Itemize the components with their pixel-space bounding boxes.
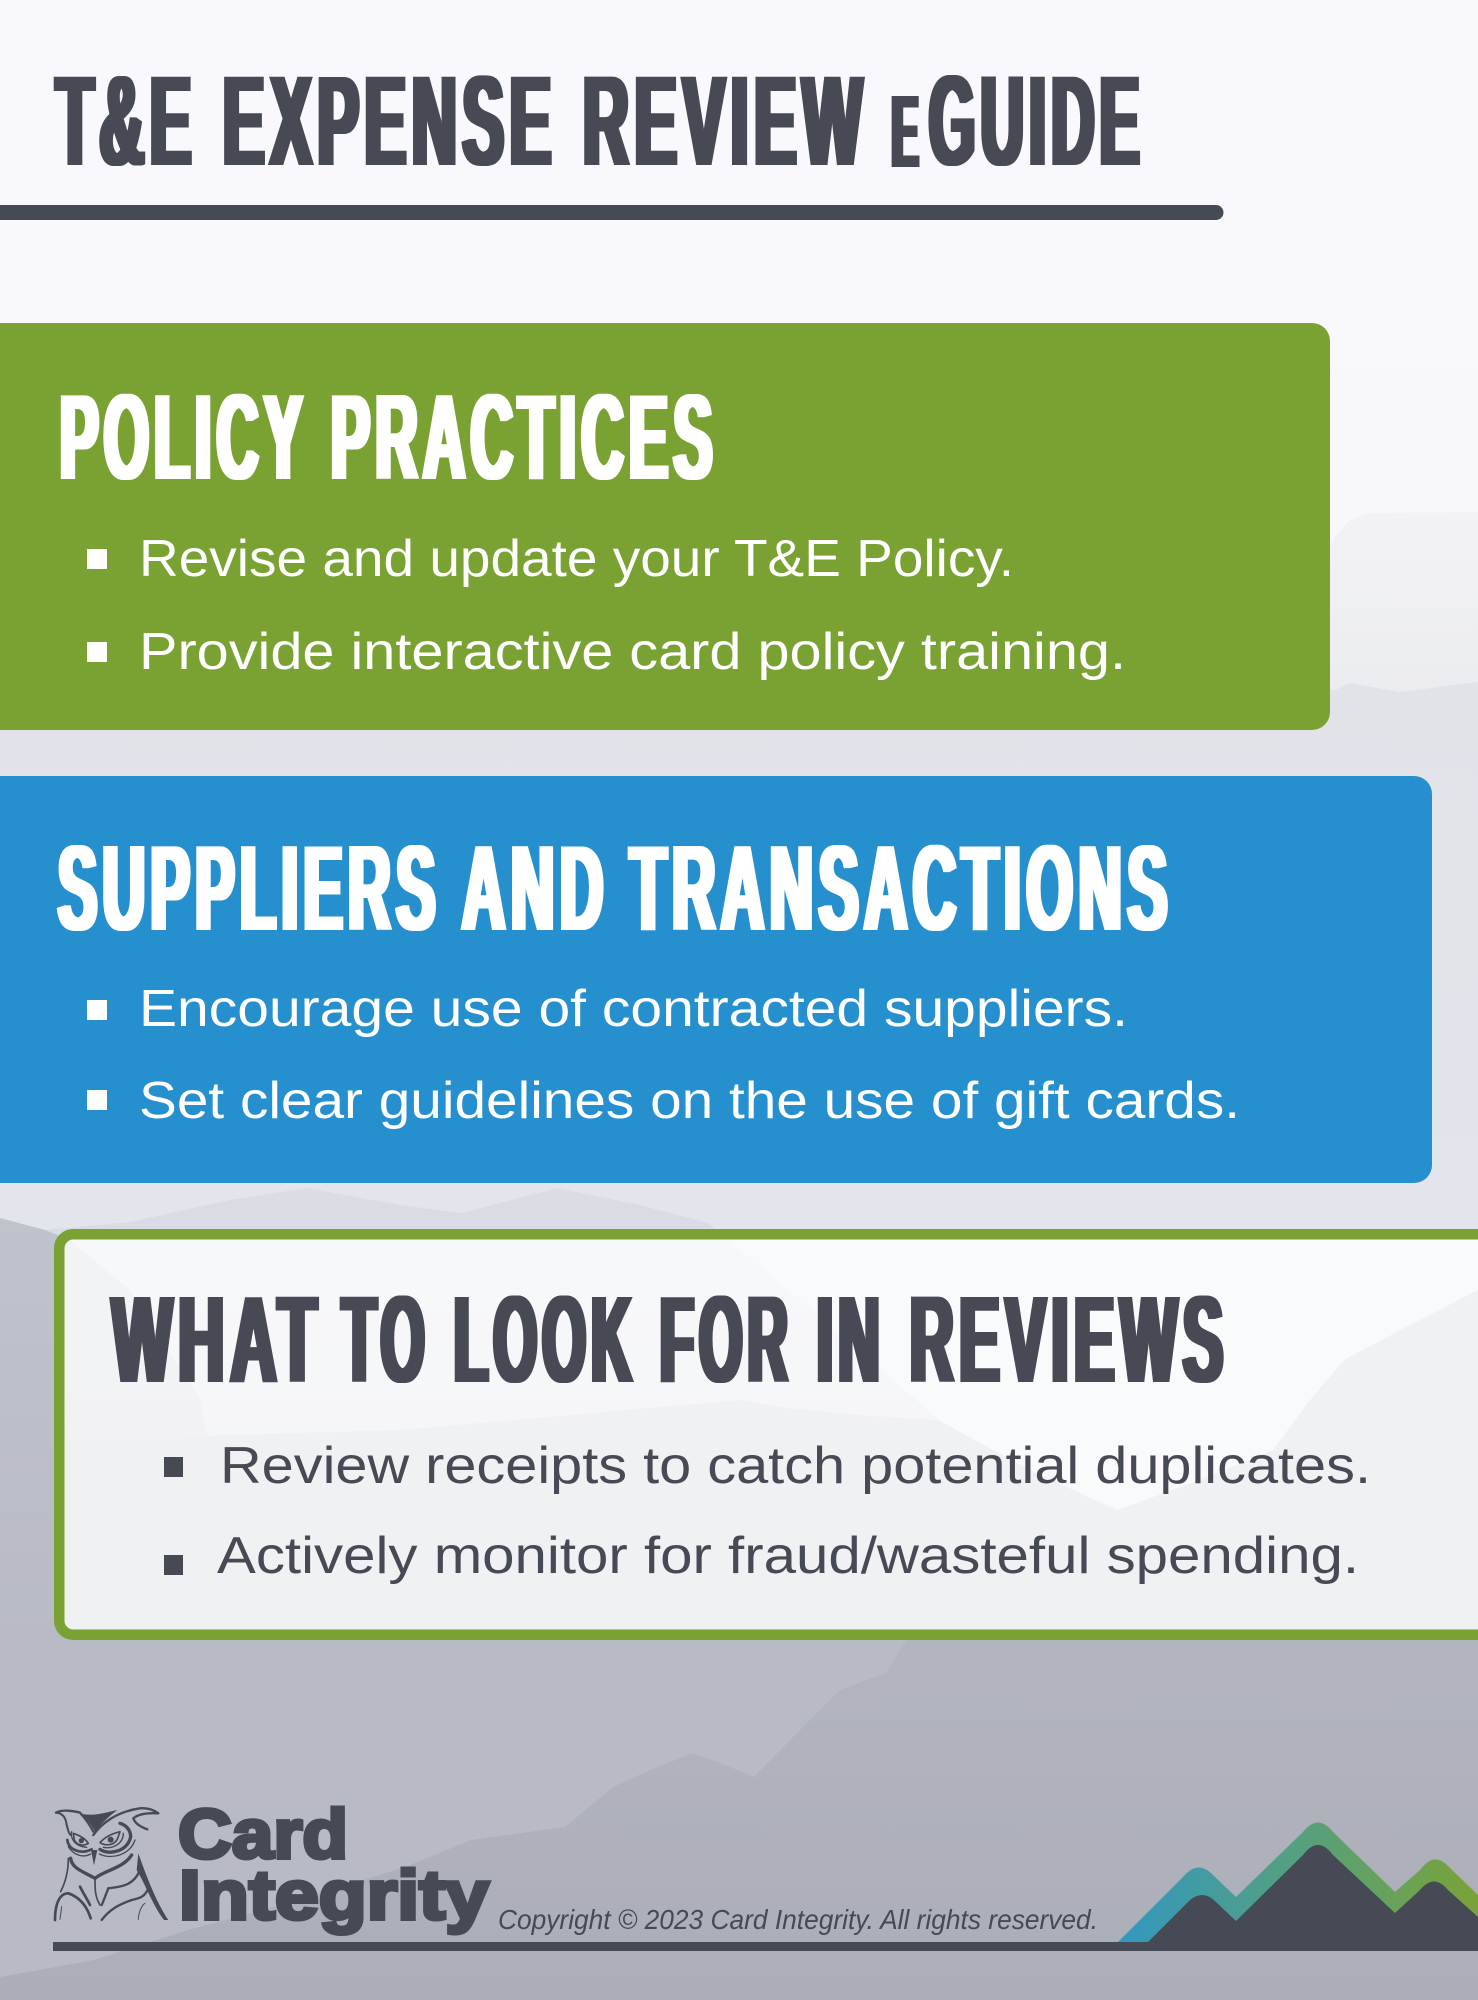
bullet list: policy practices: Revise and update your T&E Policy. <box>139 530 1014 588</box>
copyright: Copyright © 2023 Card Integrity. All rights reserved. <box>498 1904 1098 1935</box>
heading: what to look for in reviews: FOR <box>660 1272 793 1409</box>
logo wordmark: Card <box>178 1795 348 1873</box>
bullet list: review checks <box>164 1437 1371 1585</box>
icon: owl logo <box>55 1808 168 1920</box>
panel: policy practices <box>0 323 1330 730</box>
bullet list: review checks: Review receipts to catch potential duplicates. <box>220 1437 1371 1495</box>
title: T&E <box>56 50 197 193</box>
text: GUIDE <box>929 50 1145 193</box>
heading: suppliers and transactions: AND <box>462 820 609 956</box>
bullet list: policy practices: Provide interactive card policy training. <box>139 623 1126 681</box>
title: EXPENSE <box>223 50 557 193</box>
bullet list: suppliers and transactions: Encourage use of contracted suppliers. <box>139 980 1128 1038</box>
panel: suppliers and transactions <box>0 776 1432 1183</box>
title underline <box>0 205 1224 220</box>
bullet list: policy practices <box>87 530 1126 681</box>
bullet list: review checks: Actively monitor for fraud/wasteful spending. <box>217 1527 1359 1585</box>
title: E <box>892 74 918 189</box>
title <box>56 50 1145 193</box>
panel: what to look for in reviews <box>59 1234 1478 1635</box>
bullet list: suppliers and transactions <box>87 980 1240 1130</box>
icon: mountain emblem <box>1118 1822 1478 1951</box>
heading: what to look for in reviews: LOOK <box>454 1272 637 1409</box>
footer rule <box>53 1942 1478 1951</box>
bullet list: suppliers and transactions: Set clear guidelines on the use of gift cards. <box>139 1072 1240 1130</box>
logo wordmark: Integrity <box>179 1856 489 1934</box>
heading: what to look for in reviews: WHAT <box>112 1272 323 1409</box>
heading: what to look for in reviews: TO <box>342 1272 430 1409</box>
panel: policy practices: PRACTICES <box>331 369 718 505</box>
title: REVIEW <box>583 50 868 193</box>
logo wordmark <box>178 1795 489 1934</box>
heading: suppliers and transactions: SUPPLIERS <box>58 820 441 956</box>
heading: what to look for in reviews <box>112 1272 1229 1409</box>
heading: policy practices: POLICY <box>60 369 308 505</box>
heading: what to look for in reviews: IN <box>817 1272 885 1409</box>
